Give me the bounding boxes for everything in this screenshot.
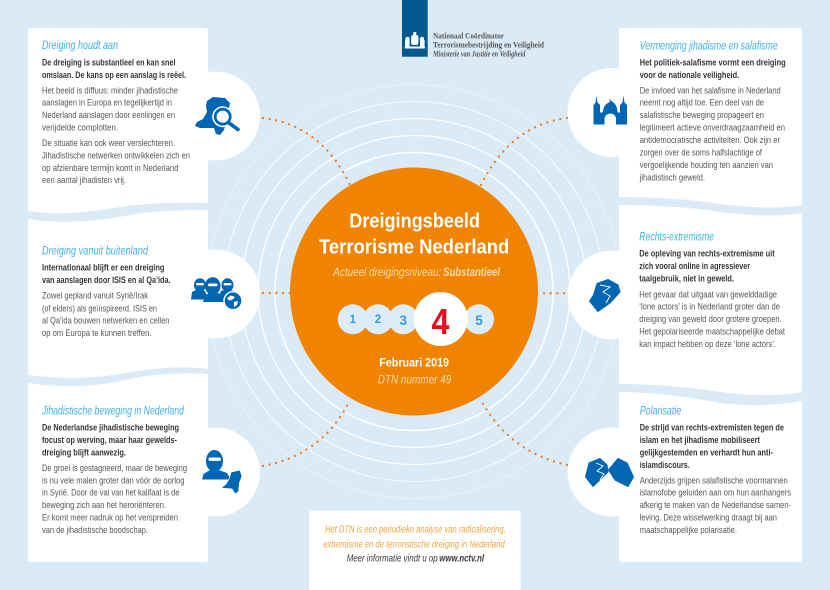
- body text: in Syrië. Door de val van het kalifaat is de: [42, 488, 180, 498]
- panel: Dreiging vanuit buitenland: [28, 210, 260, 378]
- icon: three masked figures with globe: [191, 277, 243, 310]
- icon: masked figure with map: [202, 450, 242, 494]
- intro text: taalgebruik, niet in geweld.: [639, 274, 734, 284]
- body text: salafistische beweging propageert en: [640, 110, 764, 120]
- body text: al Qa’ida bouwen netwerken en cellen: [42, 316, 170, 326]
- logo text: Ministerie van Justitie en Veiligheid: [432, 49, 526, 59]
- body text: [42, 85, 190, 185]
- note text: [323, 525, 507, 550]
- intro text: [42, 423, 179, 457]
- body text: legitimeert actieve onverdraagzaamheid en: [640, 122, 785, 132]
- heading: Jihadistische beweging in Nederland: [41, 405, 184, 417]
- heading: Rechts-extremisme: [639, 232, 714, 244]
- body text: dreiging van geweld door grotere groepen.: [639, 314, 782, 324]
- panel: bottom note: [309, 511, 521, 590]
- threat level label: Substantieel: [443, 267, 501, 279]
- intro text: De Nederlandse jihadistische beweging: [42, 423, 179, 433]
- panel: Polarisatie: [568, 392, 802, 562]
- more information link: www.nctv.nl: [439, 554, 484, 565]
- logo text: Terrorismebestrijding en Veiligheid: [433, 40, 544, 50]
- body text: (of elders) als geïnspireerd. ISIS en: [42, 303, 157, 313]
- body text: De situatie kan ook weer verslechteren.: [42, 138, 175, 148]
- title: Terrorisme Nederland: [319, 235, 509, 258]
- heading: Dreiging vanuit buitenland: [42, 245, 148, 257]
- body text: [639, 85, 785, 182]
- intro text: gelijkgestemden en verhardt hun anti-: [640, 448, 773, 458]
- body text: Het gevaar dat uitgaat van gewelddadige: [639, 289, 777, 299]
- body text: Nederland aanslagen door eenlingen en: [42, 110, 175, 120]
- body text: aanslagen in Europa en tegelijkertijd in: [42, 98, 172, 108]
- body text: leving. Deze wisselwerking draagt bij aan: [640, 512, 777, 522]
- body text: op afzienbare termijn komt in Nederland: [42, 163, 178, 173]
- date: Februari 2019: [379, 358, 449, 370]
- panel: Jihadistische beweging in Nederland: [28, 374, 260, 562]
- panel: Dreiging houdt aan: [28, 28, 260, 213]
- body text: Er komt meer nadruk op het verspreiden: [42, 512, 178, 522]
- body text: jihadistisch geweld.: [639, 172, 705, 182]
- body text: Het beeld is diffuus: minder jihadistische: [42, 85, 178, 95]
- note text: Het DTN is een periodieke analyse van radicalisering,: [325, 525, 506, 536]
- body text: van de jihadistische boodschap.: [42, 525, 148, 535]
- heading: Polarisatie: [640, 405, 681, 417]
- logo text: Nationaal Coördinator: [433, 31, 504, 41]
- threat level scale: [338, 292, 494, 346]
- dotted connectors: [263, 118, 567, 466]
- threat level scale: 2: [375, 314, 381, 326]
- body text: Jihadistische netwerken ontwikkelen zich en: [42, 150, 190, 160]
- body text: antidemocratische activiteiten. Ook zijn er: [640, 135, 780, 145]
- body text: neemt nog altijd toe. Een deel van de: [640, 98, 764, 108]
- panel: Vermenging jihadisme en salafisme: [568, 28, 802, 208]
- threat level scale: 4: [432, 301, 450, 342]
- intro text: [42, 263, 170, 285]
- intro text: [640, 423, 784, 470]
- note text: extremisme en de terroristische dreiging in Nederland.: [323, 539, 507, 550]
- threat level scale: 3: [400, 313, 408, 328]
- logo text: [432, 31, 544, 59]
- body text: [42, 291, 170, 338]
- icon: fist: [590, 280, 620, 312]
- intro text: omslaan. De kans op een aanslag is reëel.: [42, 70, 186, 80]
- body text: Het gepolariseerde maatschappelijke debat: [639, 326, 785, 336]
- body text: [42, 463, 187, 535]
- body text: De groei is gestagneerd, maar de beweging: [42, 463, 187, 473]
- threat level scale: 5: [475, 313, 483, 328]
- more information link: Meer informatie vindt u op: [347, 554, 438, 565]
- intro text: [640, 58, 786, 80]
- intro text: [42, 58, 186, 80]
- panel: Rechts-extremisme: [568, 205, 802, 395]
- intro text: dreiging blijft aanwezig.: [42, 447, 126, 457]
- body text: beweging zich aan het heroriënteren.: [42, 500, 166, 510]
- body text: Zowel gepland vanuit Syrië/Irak: [42, 291, 148, 301]
- intro text: islamdiscours.: [640, 460, 690, 470]
- heading: Vermenging jihadisme en salafisme: [640, 40, 778, 52]
- logo: Rijksoverheid: [402, 0, 428, 57]
- intro text: Internationaal blijft er een dreiging: [42, 263, 164, 273]
- body text: Anderzijds grijpen salafistische voormannen: [640, 475, 788, 485]
- body text: een aantal jihadisten vrij.: [42, 175, 126, 185]
- body text: kan impact hebben op deze ‘lone actors’.: [639, 339, 776, 349]
- intro text: focust op werving, maar haar gewelds-: [42, 435, 177, 445]
- body text: De invloed van het salafisme in Nederland: [640, 85, 781, 95]
- body text: verijdelde complotten.: [42, 122, 118, 132]
- intro text: van aanslagen door ISIS en al Qa’ida.: [42, 275, 170, 285]
- body text: vergoelijkende houding ten aanzien van: [640, 160, 773, 170]
- icon: crest: [404, 32, 425, 48]
- body text: [640, 475, 791, 535]
- issue number: DTN nummer 49: [378, 374, 452, 386]
- intro text: islam en het jihadisme mobiliseert: [640, 435, 760, 445]
- body text: maatschappelijke polarisatie.: [640, 525, 737, 535]
- icon: mosque: [594, 96, 627, 124]
- title: [319, 210, 509, 258]
- intro text: De strijd van rechts-extremisten tegen de: [640, 423, 784, 433]
- body text: ‘lone actors’ is in Nederland groter dan de: [639, 302, 780, 312]
- intro text: zich vooral online in agressiever: [639, 261, 750, 271]
- icon: two fists: [586, 458, 634, 486]
- title: Dreigingsbeeld: [349, 210, 480, 233]
- heading: Dreiging houdt aan: [42, 40, 118, 52]
- body text: is nu vele malen groter dan vóór de oorlog: [42, 475, 184, 485]
- intro text: De dreiging is substantieel en kan snel: [42, 58, 176, 68]
- threat level scale: 1: [349, 314, 356, 326]
- body text: op om Europa te kunnen treffen.: [42, 328, 152, 338]
- threat level label: Actueel dreigingsniveau:: [332, 267, 441, 279]
- panel: central orange circle: [290, 168, 538, 416]
- body text: zorgen over de soms halfslachtige of: [640, 148, 762, 158]
- body text: afkerig te maken van de Nederlandse samen-: [640, 500, 791, 510]
- intro text: voor de nationale veiligheid.: [640, 70, 739, 80]
- icon: map with magnifier: [195, 97, 238, 135]
- body text: [639, 289, 785, 349]
- intro text: Het politiek-salafisme vormt een dreiging: [640, 58, 786, 68]
- intro text: [639, 249, 775, 284]
- intro text: De opleving van rechts-extremisme uit: [639, 249, 775, 259]
- body text: islamofobe geluiden aan om hun aanhangers: [640, 488, 791, 498]
